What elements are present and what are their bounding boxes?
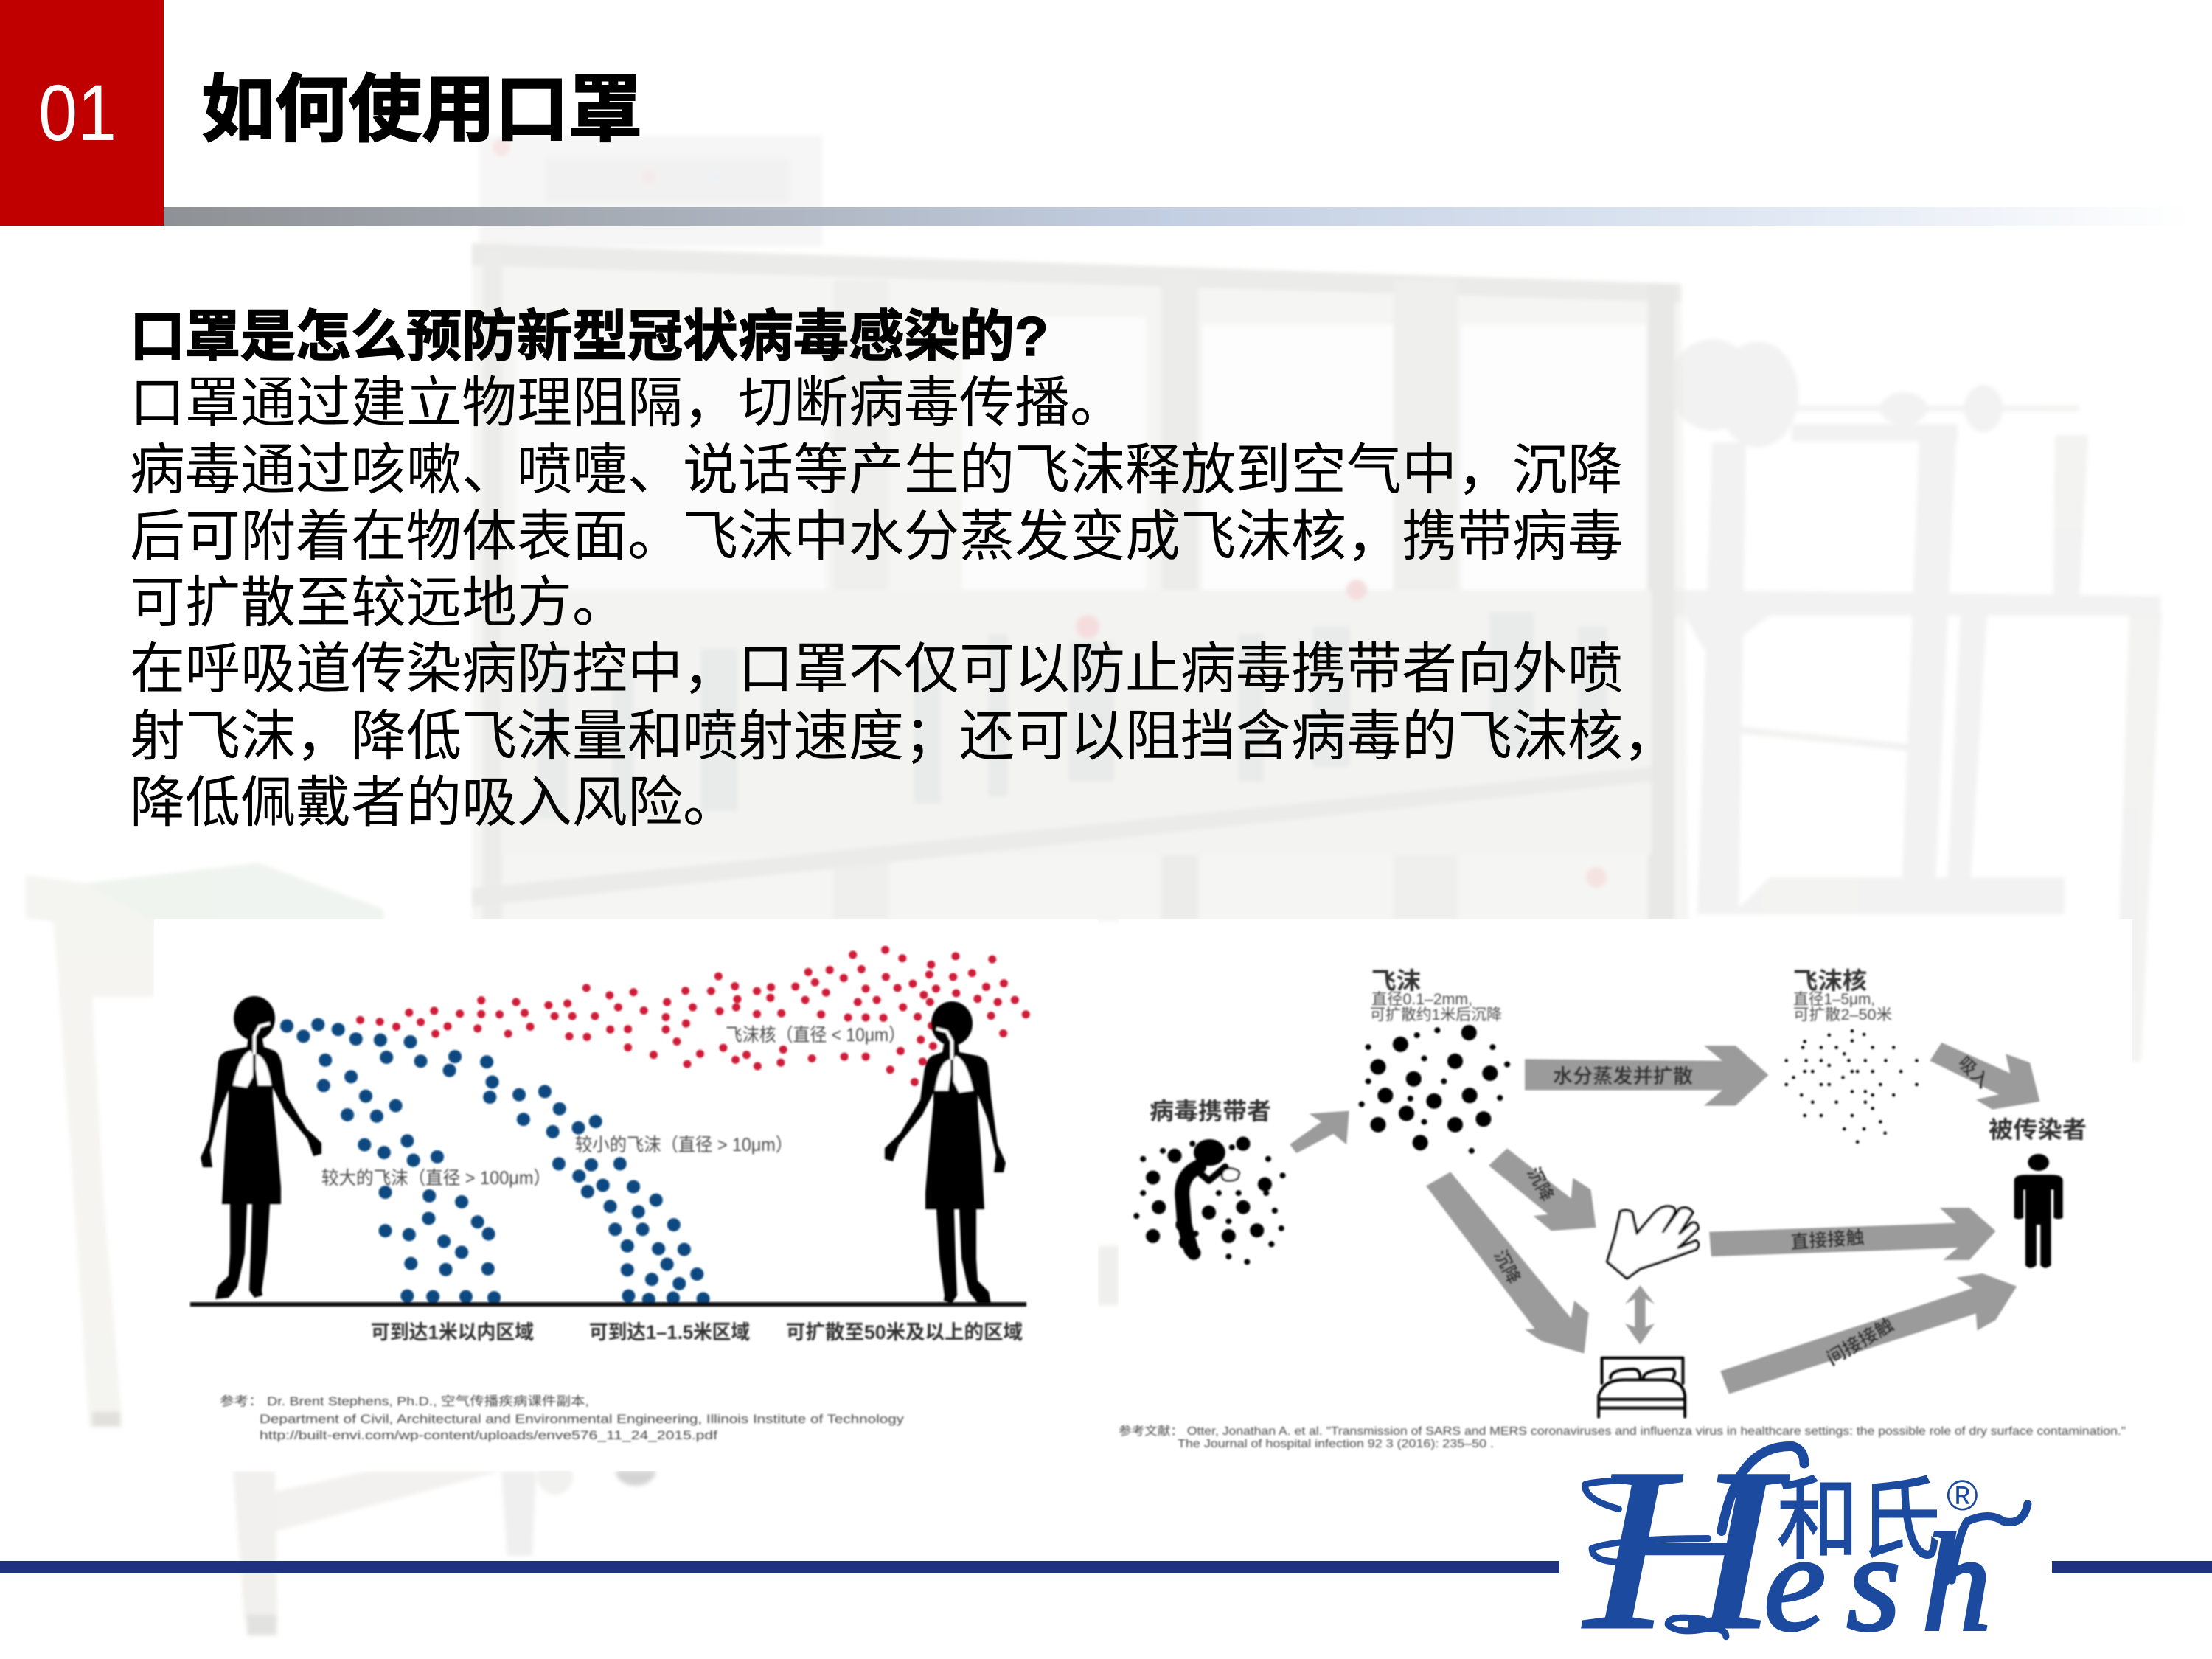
diagram labels: 直接接触: [1790, 1228, 1865, 1253]
top control box: [479, 136, 822, 246]
reference note: 参考文献： Otter, Jonathan A. et al. "Transmission of SARS and MERS coronaviruses and influenza virus in healthcare settings: the possible role of dry surface contamination.": [1119, 1425, 2126, 1438]
diagram labels: 病毒携带者: [1150, 1098, 1271, 1124]
footer bar: [0, 1561, 2212, 1573]
diagram labels: 可到达1–1.5米区域: [589, 1321, 750, 1343]
logo: Hesh: esh: [1764, 1506, 1992, 1659]
diagram labels: 沉降: [1489, 1247, 1524, 1287]
diagram labels: 直径1–5μm,: [1793, 991, 1875, 1008]
title: 如何使用口罩: [201, 69, 642, 151]
gray flow arrows: [1290, 1043, 2039, 1394]
main text block: 射飞沫，降低飞沫量和喷射速度；还可以阻挡含病毒的飞沫核，: [130, 705, 1678, 767]
droplet dots: blue large droplets: [287, 1025, 703, 1299]
diagram labels: 直径0.1–2mm,: [1371, 991, 1472, 1008]
left table and legs: [26, 863, 1119, 1635]
icon: coughing carrier: [1136, 1139, 1283, 1262]
main text block: 降低佩戴者的吸入风险。: [130, 771, 738, 833]
diagram labels: 飞沫: [1371, 967, 1421, 994]
reference note: Department of Civil, Architectural and Environmental Engineering, Illinois Institute of Technology: [260, 1412, 905, 1426]
silhouette: right woman: [885, 1001, 1006, 1304]
droplet dots: red droplet nuclei: [360, 950, 1026, 1082]
diagram labels: 可扩散约1米后沉降: [1370, 1006, 1502, 1023]
diagram labels: 被传染者: [1989, 1116, 2087, 1143]
header: red section number box: 01: [38, 68, 116, 157]
panel: transmission route diagram: [1119, 919, 2132, 1458]
right side rollers and frames: [1669, 339, 2162, 1062]
icon: bed: [1599, 1358, 1685, 1417]
reference note: http://built-envi.com/wp-content/uploads/enve576_11_24_2015.pdf: [260, 1428, 717, 1442]
icon: infected person: [2014, 1154, 2063, 1268]
main text block: [130, 305, 1678, 833]
header: red section number box: [0, 0, 164, 226]
main text block: 在呼吸道传染病防控中，口罩不仅可以防止病毒携带者向外喷: [130, 638, 1623, 700]
diagram labels: 可扩散2–50米: [1793, 1006, 1892, 1023]
main text block: 后可附着在物体表面。飞沫中水分蒸发变成飞沫核，携带病毒: [130, 505, 1623, 567]
ground line: [190, 1302, 1026, 1307]
diagram labels: 沉降: [1523, 1164, 1557, 1205]
reference note: The Journal of hospital infection 92 3 (2016): 235–50 .: [1178, 1438, 1494, 1450]
reference note: [220, 1394, 905, 1442]
logo: Hesh: [1581, 1421, 2028, 1659]
diagram labels: 水分蒸发并扩散: [1553, 1065, 1693, 1088]
diagram labels: 较大的飞沫（直径 > 100μm）: [321, 1168, 551, 1189]
diagram labels: 吸入: [1954, 1053, 1993, 1092]
main text block: 口罩是怎么预防新型冠状病毒感染的?: [130, 305, 1048, 367]
diagram labels: 可扩散至50米及以上的区域: [786, 1321, 1023, 1343]
diagram labels: [321, 1025, 1023, 1343]
logo swashes: [1585, 1447, 2028, 1637]
main text block: 病毒通过咳嗽、喷嚏、说话等产生的飞沫释放到空气中，沉降: [130, 439, 1623, 501]
diagram labels: 可到达1米以内区域: [371, 1321, 534, 1343]
icon: hand: [1607, 1206, 1698, 1279]
main text block: 口罩通过建立物理阻隔，切断病毒传播。: [130, 372, 1125, 434]
panel: droplet spread diagram: [154, 919, 1098, 1471]
icon: droplet cloud: [1362, 1030, 1507, 1151]
machine body with frame and windows: [472, 243, 1688, 922]
diagram labels: 间接接触: [1823, 1315, 1897, 1369]
icon: droplet nuclei cloud: [1787, 1031, 1917, 1142]
header: gradient divider band: [164, 207, 2191, 226]
silhouette: left woman: [201, 996, 321, 1299]
reference note: [1119, 1425, 2126, 1450]
reference note: 参考： Dr. Brent Stephens, Ph.D., 空气传播疾病课件副本,: [220, 1394, 589, 1408]
diagram labels: 飞沫核（直径 < 10μm）: [726, 1025, 905, 1046]
diagram labels: 飞沫核: [1793, 967, 1867, 994]
logo: Hesh: 和氏: [1777, 1470, 1941, 1571]
main text block: 可扩散至较远地方。: [130, 571, 627, 633]
diagram labels: 较小的飞沫（直径 > 10μm）: [575, 1135, 793, 1155]
diagram labels: [1150, 967, 2087, 1369]
logo: Hesh: ®: [1947, 1472, 1978, 1520]
